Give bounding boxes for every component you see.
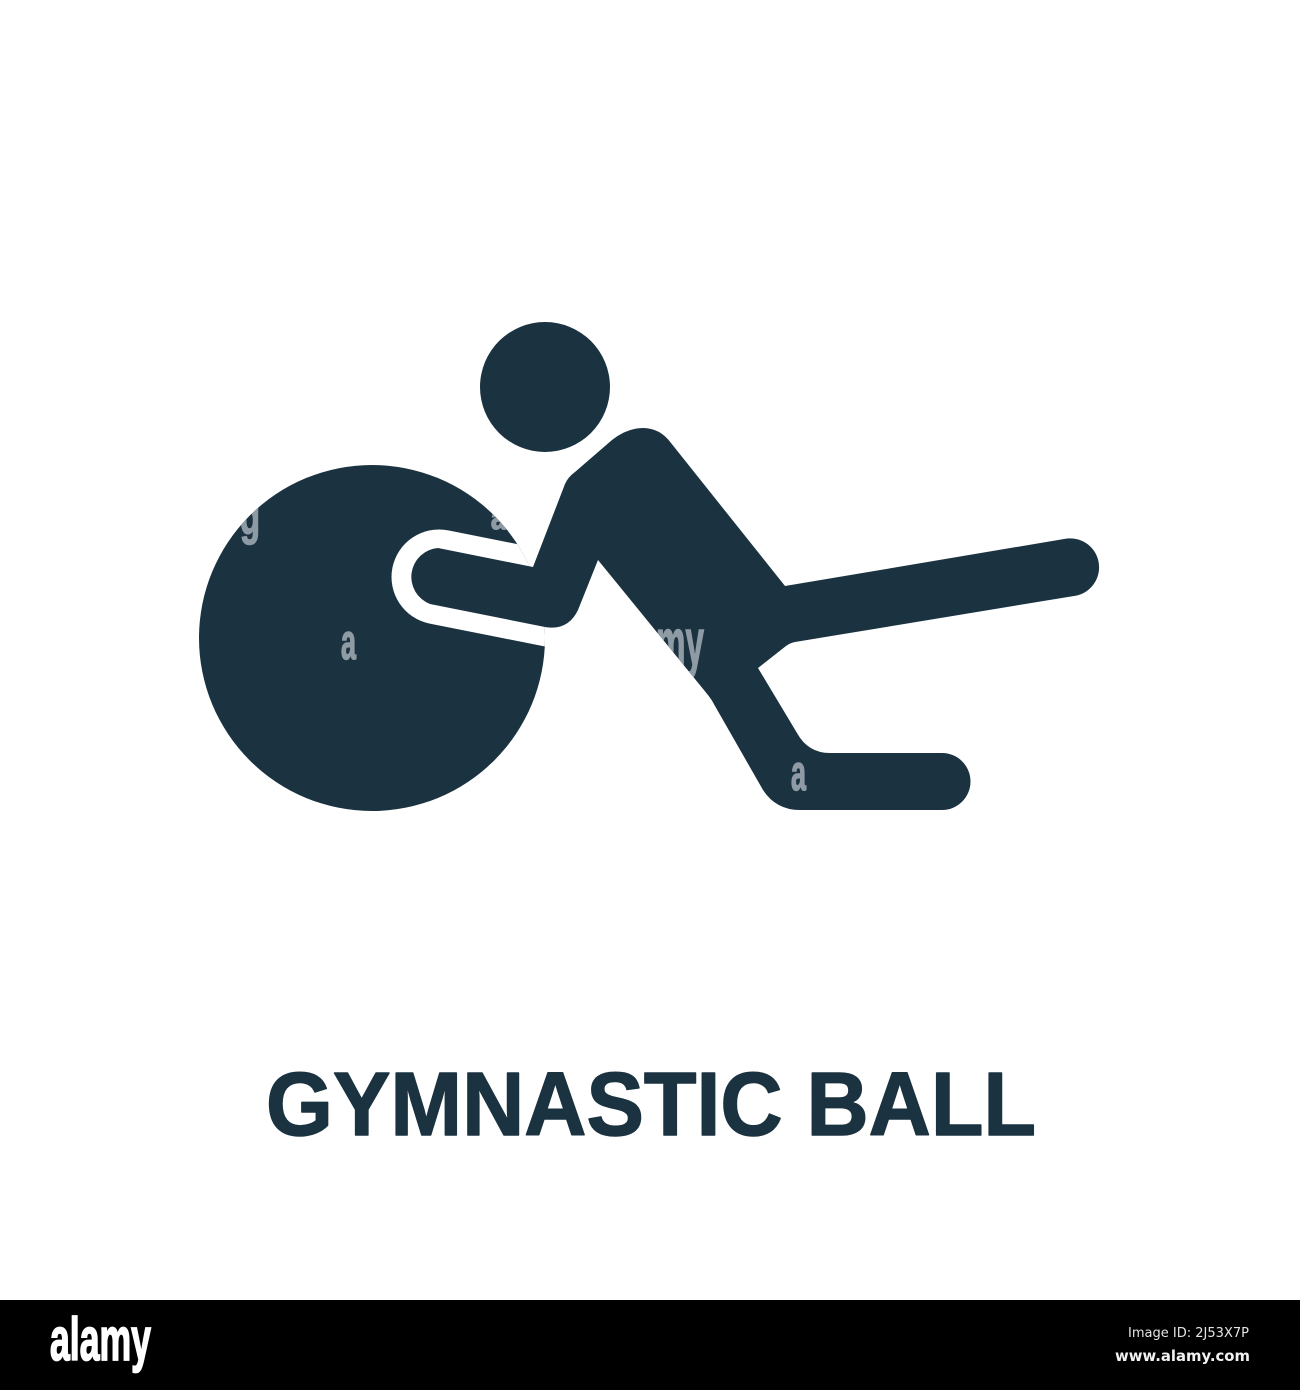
title: GYMNASTIC BALL [266,1055,1036,1155]
infographic canvas [0,322,1300,1390]
website url: www.alamy.com [1115,1347,1250,1365]
watermark fragments on body [658,628,807,792]
watermark fragments on ball [241,508,506,660]
watermark fragments on body: my [656,605,704,679]
icon: head [480,322,610,452]
icon: body, arm and legs [411,428,1099,810]
watermark fragments on ball: a [341,614,357,670]
image id: Image ID: 2J53X7P [1128,1325,1249,1341]
footer logo: alamy [50,1306,151,1373]
watermark fragments on ball: a [491,500,506,536]
icon: person exercising with gymnastic ball [199,322,1099,811]
watermark fragments on ball: g [240,489,260,545]
icon: gymnastic ball [199,465,545,811]
footer banner [0,1300,1300,1390]
watermark fragments on body: a [791,745,807,801]
